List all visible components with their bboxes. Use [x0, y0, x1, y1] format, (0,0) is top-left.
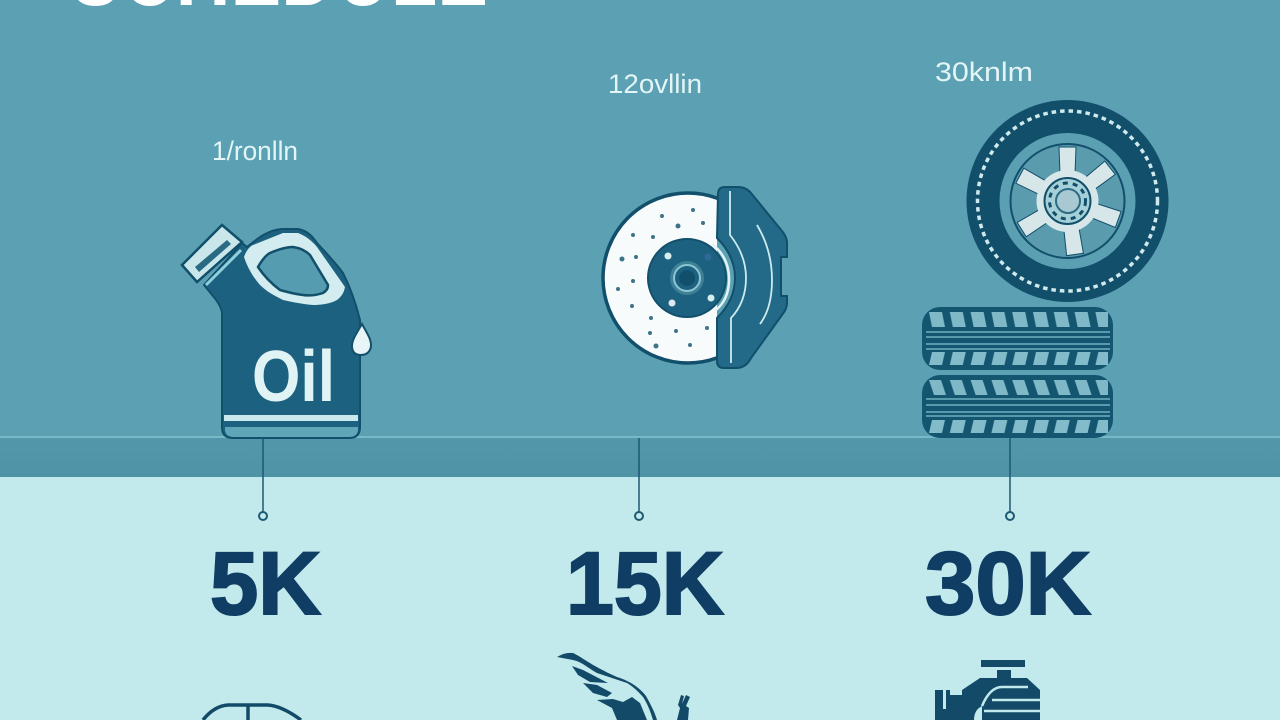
icon: wheel: [966, 100, 1168, 302]
background: lower panel: [0, 477, 1280, 720]
icon: oil jug: [182, 225, 371, 438]
oil drop: [352, 324, 371, 355]
number: 30K: 30K: [925, 533, 1091, 633]
label: third interval: 30knlm: [935, 57, 1033, 87]
number: 15K: 15K: [566, 533, 724, 633]
marker: 5K connector: [259, 438, 267, 520]
label: second interval: 12ovllin: [608, 69, 702, 99]
spokes: [1016, 147, 1121, 256]
label: first interval: 1/ronlln: [212, 136, 298, 166]
background: road band: [0, 438, 1280, 477]
oil label: Oil: [252, 337, 335, 417]
caliper: [717, 187, 787, 368]
icon: stacked tyres: [922, 307, 1113, 438]
icon: engine: [935, 660, 1040, 720]
icon: brake disc: [603, 187, 787, 368]
icon: car roof: [203, 705, 301, 720]
hub: [648, 239, 726, 317]
marker: 15K connector: [635, 438, 643, 520]
background: upper panel: [0, 0, 1280, 438]
number: 5K: 5K: [210, 533, 321, 633]
icon: wing: [557, 653, 690, 720]
marker: 30K connector: [1006, 438, 1014, 520]
